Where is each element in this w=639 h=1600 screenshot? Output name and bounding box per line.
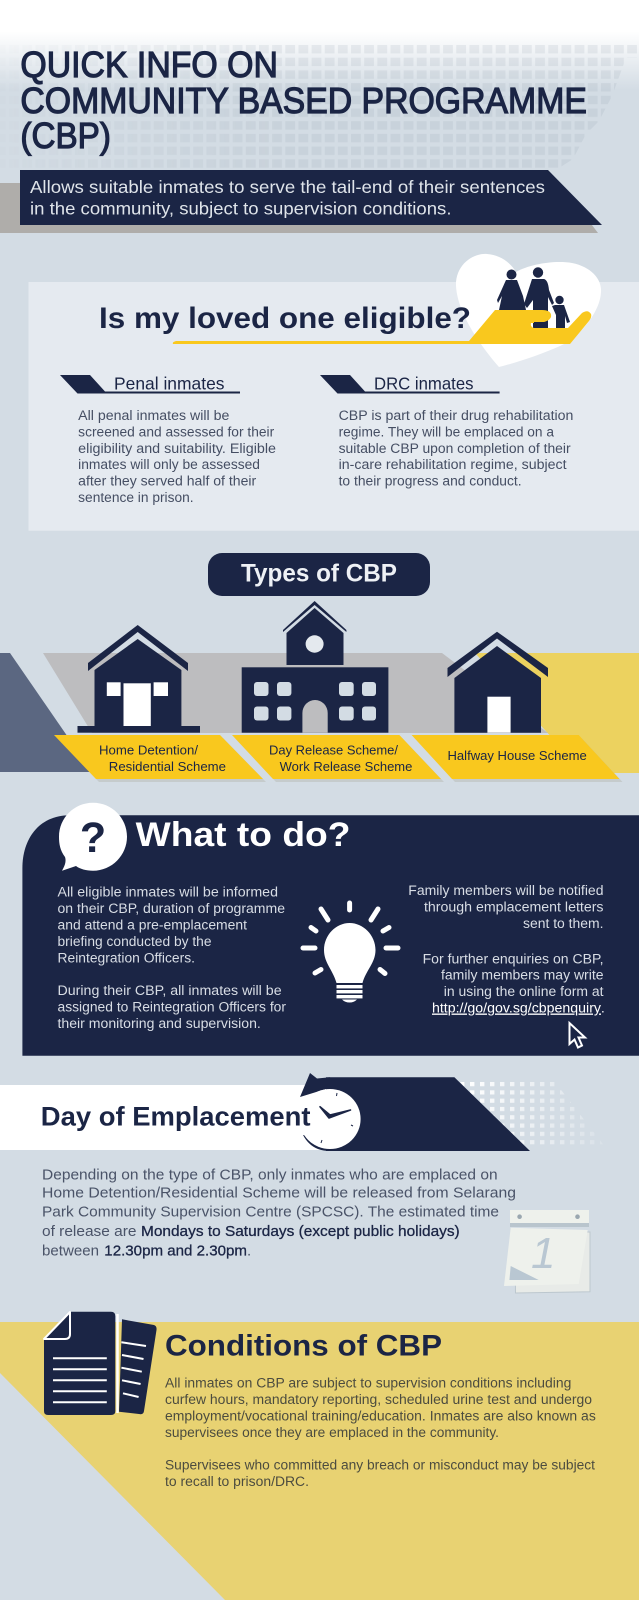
label: halfway house: Halfway House Scheme [448, 748, 587, 763]
panel: what to do [22, 803, 639, 1056]
left text block: All eligible inmates will be informed [58, 885, 278, 900]
body text: Mondays to Saturdays (except public holidays) [141, 1223, 460, 1240]
panel: day of emplacement [0, 1073, 606, 1293]
icon: calendar: 1 [531, 1229, 555, 1278]
icon: cursor [570, 1023, 585, 1048]
penal inmates column: sentence in prison. [78, 490, 194, 505]
right text block: http://go/gov.sg/cbpenquiry [432, 1000, 601, 1016]
right text block: through emplacement letters [424, 899, 604, 914]
body text: Supervisees who committed any breach or misconduct may be subject [165, 1458, 595, 1473]
icon: question bubble [59, 803, 127, 871]
heading: what to do: What to do? [136, 816, 350, 854]
DRC inmates column: DRC inmates [374, 373, 474, 393]
title: QUICK INFO ON [20, 44, 278, 85]
left text block [58, 885, 287, 1031]
body text: of release are [42, 1223, 136, 1240]
subtitle banner [0, 170, 602, 233]
subtitle banner: in the community, subject to supervision conditions. [30, 198, 451, 218]
body text: curfew hours, mandatory reporting, scheduled urine test and undergo [165, 1392, 592, 1407]
title [20, 44, 587, 156]
body text: 12.30pm and 2.30pm [104, 1243, 247, 1260]
body text: Home Detention/Residential Scheme will be released from Selarang [42, 1185, 516, 1202]
right text block: Family members will be notified [408, 883, 604, 898]
penal inmates column [60, 373, 276, 505]
body text: employment/vocational training/education. Inmates are also known as [165, 1408, 596, 1424]
subtitle banner: Allows suitable inmates to serve the tail-end of their sentences [30, 177, 545, 197]
label: home detention [54, 735, 266, 782]
heading: conditions of CBP: Conditions of CBP [165, 1330, 442, 1363]
DRC inmates column: regime. They will be emplaced on a [339, 424, 554, 439]
DRC inmates column: in-care rehabilitation regime, subject [339, 457, 567, 472]
panel: types of CBP [0, 553, 639, 782]
icon: light bulb [303, 903, 398, 1002]
left text block: assigned to Reintegration Officers for [58, 1000, 287, 1014]
penal inmates column: All penal inmates will be [78, 408, 229, 423]
DRC inmates column: suitable CBP upon completion of their [339, 441, 571, 456]
title: COMMUNITY BASED PROGRAMME [20, 80, 587, 121]
background shapes [0, 653, 639, 773]
body text: between [42, 1243, 99, 1260]
icon: documents [44, 1312, 157, 1415]
icon: home [78, 625, 200, 733]
left text block: and attend a pre-emplacement [58, 918, 247, 932]
DRC inmates column: to their progress and conduct. [339, 474, 522, 489]
panel: eligibility [28, 254, 639, 531]
right text block: . [601, 1000, 605, 1016]
icon: school building [242, 601, 388, 733]
body text: supervisees once they are emplaced in the community. [165, 1425, 499, 1440]
heading: is my loved one eligible: Is my loved one eligible? [99, 302, 471, 335]
icon: question bubble: ? [80, 814, 106, 862]
penal inmates column: after they served half of their [78, 474, 257, 489]
heading: day of emplacement: Day of Emplacement [41, 1102, 311, 1132]
right text block: family members may write [441, 968, 604, 983]
right text block: For further enquiries on CBP, [423, 951, 604, 966]
label: home detention: Residential Scheme [109, 759, 226, 774]
label: home detention: Home Detention/ [99, 742, 198, 757]
body text [42, 1166, 516, 1260]
left text block: on their CBP, duration of programme [58, 901, 285, 916]
DRC inmates column: CBP is part of their drug rehabilitation [339, 408, 573, 423]
right text block [408, 883, 605, 1016]
body text: Park Community Supervision Centre (SPCSC). The estimated time [42, 1204, 499, 1221]
DRC inmates column [320, 373, 573, 489]
penal inmates column: eligibility and suitability. Eligible [78, 441, 276, 456]
penal inmates column: screened and assessed for their [78, 424, 275, 439]
title: (CBP) [20, 115, 111, 156]
penal inmates column: inmates will only be assessed [78, 457, 260, 472]
penal inmates column: Penal inmates [114, 373, 225, 393]
panel: conditions of CBP [0, 1312, 639, 1600]
icon: heart with family on hand [173, 254, 601, 367]
icon: calendar [504, 1210, 590, 1293]
right text block: sent to them. [523, 916, 604, 931]
label: day release [232, 735, 444, 782]
body text: All inmates on CBP are subject to supervision conditions including [165, 1376, 571, 1391]
heading pill: Types of CBP [241, 560, 397, 588]
left text block: briefing conducted by the [58, 934, 212, 949]
label: day release: Work Release Scheme [280, 759, 412, 774]
body text: to recall to prison/DRC. [165, 1474, 309, 1489]
left text block: their monitoring and supervision. [58, 1016, 261, 1031]
icon: halfway house [448, 632, 548, 733]
header band with clock [0, 1073, 606, 1151]
right text block: in using the online form at [444, 984, 604, 999]
heading pill [208, 553, 430, 596]
body text: Depending on the type of CBP, only inmates who are emplaced on [42, 1166, 498, 1183]
body text [165, 1376, 596, 1489]
label: halfway house [412, 735, 622, 782]
body text: . [247, 1243, 251, 1260]
header section [0, 0, 639, 233]
left text block: During their CBP, all inmates will be [58, 983, 282, 998]
label: day release: Day Release Scheme/ [269, 742, 398, 757]
left text block: Reintegration Officers. [58, 950, 195, 965]
